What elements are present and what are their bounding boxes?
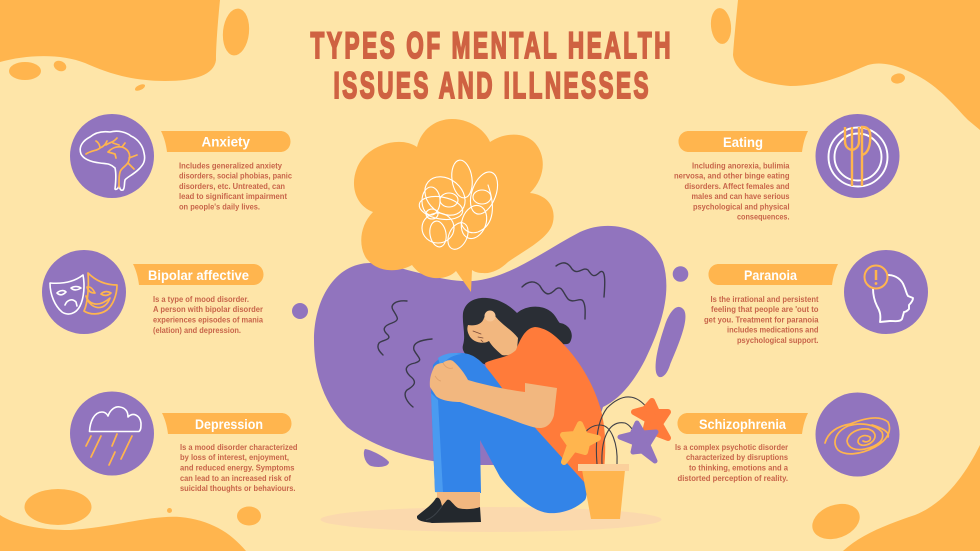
icon: head with alert (844, 250, 928, 334)
shoes (417, 498, 481, 523)
description: disorders, etc. Untreated, can (179, 182, 285, 191)
description: suicidal thoughts or behaviours. (180, 484, 296, 493)
shirt (485, 327, 605, 490)
tangled thought scribble (417, 159, 503, 252)
pot rim (578, 464, 629, 471)
description: includes medications and (727, 326, 819, 334)
description (153, 295, 264, 335)
label banner (161, 131, 290, 152)
description: males and can have serious (692, 192, 790, 201)
description: Is a type of mood disorder. (153, 295, 249, 304)
label banner (708, 264, 838, 285)
description: lead to significant impairment (179, 192, 287, 201)
orange flower (634, 401, 668, 438)
icon: scribble spiral (816, 392, 900, 476)
icon: rain cloud (70, 392, 154, 476)
icon: plate with fork and knife (816, 114, 900, 198)
icon: brain (70, 114, 154, 198)
label banner (133, 264, 264, 285)
description (674, 162, 790, 222)
description: on people's daily lives. (179, 202, 260, 212)
description: distorted perception of reality. (678, 474, 788, 483)
purple flower (620, 423, 656, 461)
purple background blob (292, 226, 688, 467)
heading: Eating (723, 134, 763, 150)
label banner (162, 413, 292, 434)
panel: Bipolar affective (42, 250, 264, 335)
description: feeling that people are 'out to (711, 305, 819, 314)
description (180, 443, 298, 493)
panel: Eating (674, 114, 900, 222)
description: disorders. Affect females and (684, 182, 790, 191)
floor shadow (320, 507, 662, 532)
description: Is a complex psychotic disorder (675, 443, 788, 452)
panel: Anxiety (70, 114, 293, 212)
description: Is the irrational and persistent (710, 295, 819, 304)
title: ISSUES AND ILLNESSES (334, 64, 649, 106)
description: psychological support. (737, 336, 818, 345)
description: Includes generalized anxiety (179, 162, 283, 170)
eye and face marks (473, 331, 483, 342)
description (179, 162, 293, 212)
panel: Schizophrenia (675, 392, 900, 483)
label banner (678, 413, 808, 434)
panel: Paranoia (704, 250, 928, 345)
illustration: sitting woman (417, 298, 605, 523)
heading: Anxiety (202, 134, 250, 150)
description: consequences. (737, 212, 790, 222)
description: psychological and physical (693, 202, 790, 212)
panel: Depression (70, 392, 298, 493)
description: to thinking, emotions and a (689, 464, 789, 472)
arm and hand (430, 360, 557, 428)
description: and reduced energy. Symptoms (180, 464, 295, 472)
description (675, 443, 789, 483)
description: (elation) and depression. (153, 326, 241, 335)
heading: Depression (195, 416, 263, 432)
squiggle lines (378, 263, 605, 407)
description: experiences episodes of mania (153, 316, 264, 324)
potted plant (563, 397, 668, 519)
description: nervosa, and other binge eating (674, 172, 790, 180)
description: characterized by disruptions (686, 453, 789, 462)
description: get you. Treatment for paranoia (704, 316, 819, 324)
heading: Schizophrenia (699, 416, 786, 432)
label banner (678, 131, 808, 152)
heading: Bipolar affective (148, 267, 249, 283)
thought bubble (354, 119, 554, 292)
leg highlight (431, 353, 462, 493)
icon: theatre masks (42, 250, 126, 334)
title: TYPES OF MENTAL HEALTH (310, 24, 671, 66)
description: can lead to an increased risk of (180, 474, 291, 483)
ear (484, 310, 496, 322)
blue legs (431, 353, 586, 513)
finger lines (435, 363, 453, 381)
yellow flower (563, 424, 598, 462)
ankle (437, 492, 480, 510)
stems (582, 397, 652, 464)
pot (582, 470, 625, 519)
hair (463, 298, 572, 366)
face and neck (467, 313, 518, 355)
description: A person with bipolar disorder (153, 305, 263, 314)
description: disorders, social phobias, panic (179, 172, 293, 180)
description: Is a mood disorder characterized (180, 443, 298, 452)
description: Including anorexia, bulimia (692, 162, 790, 170)
description: by loss of interest, enjoyment, (180, 453, 289, 462)
title (310, 24, 670, 106)
description (704, 295, 819, 345)
heading: Paranoia (744, 267, 797, 283)
